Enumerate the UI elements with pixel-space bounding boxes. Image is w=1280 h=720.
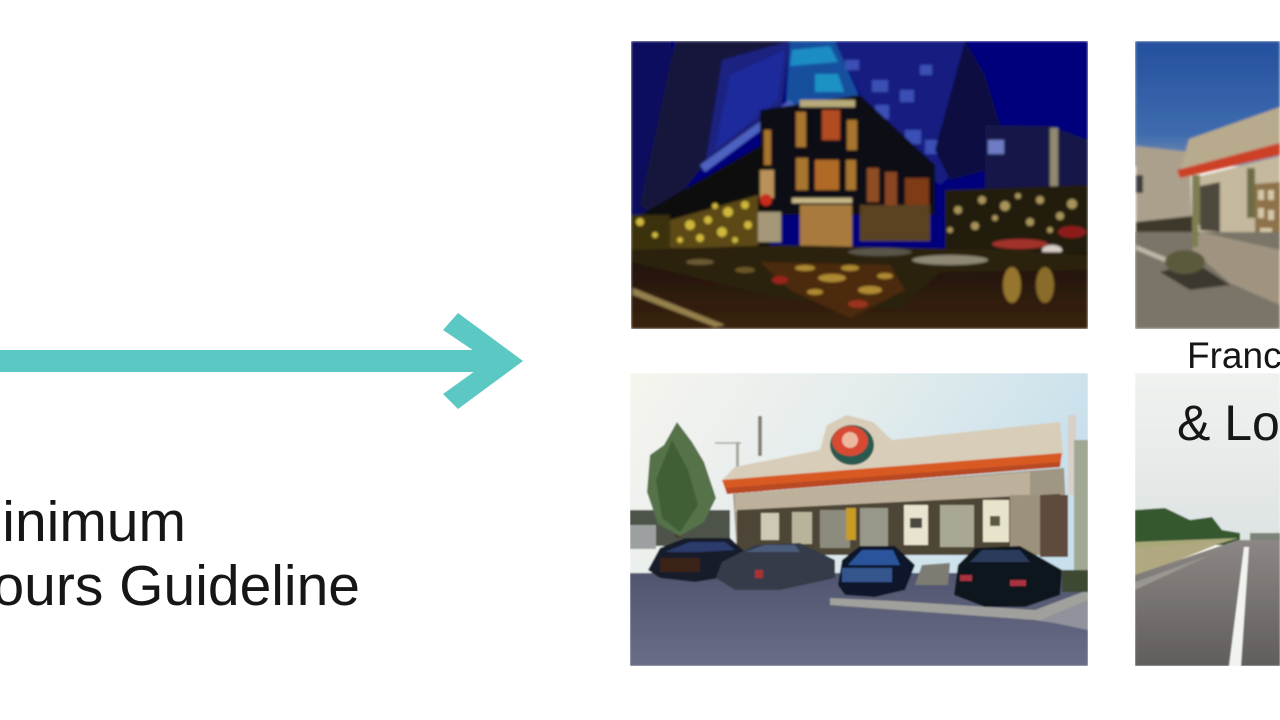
photo: drive-through restaurant with parked cars xyxy=(630,373,1088,666)
photo: restaurant exterior at dusk xyxy=(1135,41,1280,329)
parked cars xyxy=(648,538,1062,607)
photo: empty highway xyxy=(1135,373,1280,666)
tree xyxy=(647,422,716,538)
arrow pointing to the photo grid xyxy=(0,313,523,409)
text: minimum hours guideline xyxy=(0,490,360,618)
photo: city hotel at night xyxy=(631,41,1088,329)
sign logo xyxy=(830,425,874,465)
